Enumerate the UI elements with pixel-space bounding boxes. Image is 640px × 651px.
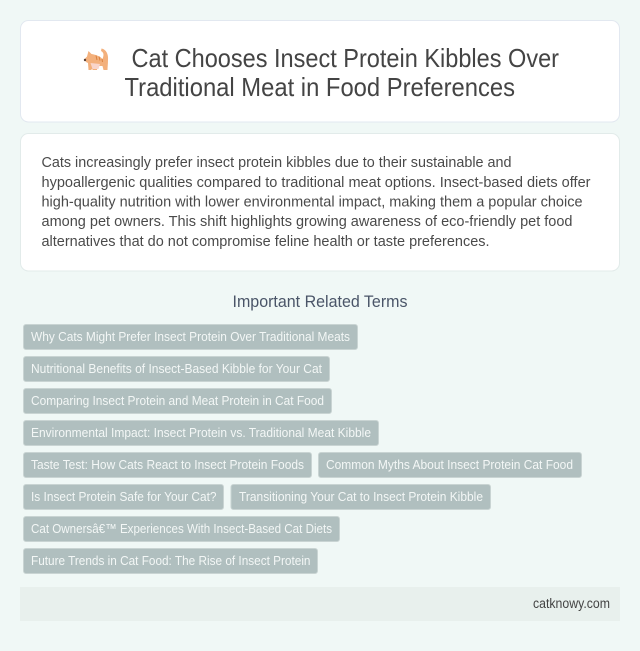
paragraph line 4: among pet owners. This shift highlights growing awareness of eco-friendly pet food [42,213,572,230]
tag: Comparing Insect Protein and Meat Protein in Cat Food [31,393,324,408]
tag [318,452,582,478]
tag: Common Myths About Insect Protein Cat Food [326,457,573,472]
tag: Is Insect Protein Safe for Your Cat? [31,489,216,504]
tag: Environmental Impact: Insect Protein vs. Traditional Meat Kibble [31,425,371,440]
footer site name: catknowy.com [533,596,610,611]
tag [24,548,318,574]
title line 2: Traditional Meat in Food Preferences [124,72,515,102]
tag [24,324,358,350]
paragraph line 3: high-quality nutrition with lower environmental impact, making them a popular choice [42,194,582,210]
paragraph line 5: alternatives that do not compromise feline health or taste preferences. [42,233,490,250]
tag: Nutritional Benefits of Insect-Based Kibble for Your Cat [31,361,322,376]
heading: important related terms: Important Related Terms [232,292,408,311]
tag: Transitioning Your Cat to Insect Protein Kibble [239,489,483,504]
tag: Future Trends in Cat Food: The Rise of Insect Protein [31,553,310,568]
tag [24,356,330,382]
tag: Taste Test: How Cats React to Insect Protein Foods [31,457,304,472]
tag [24,516,340,542]
panel: summary paragraph [20,134,620,271]
tag [24,420,378,446]
paragraph line 2: hypoallergenic qualities compared to traditional meat options. Insect-based diets offer [42,174,591,191]
footer bar [20,587,620,621]
panel: related term tags [24,324,582,574]
paragraph line 1: Cats increasingly prefer insect protein kibbles due to their sustainable and [42,154,512,171]
tag [231,484,490,510]
tag: Cat Ownersâ€™ Experiences With Insect-Based Cat Diets [31,521,332,536]
tag [24,452,312,478]
tag: Why Cats Might Prefer Insect Protein Over Traditional Meats [31,329,350,344]
tag [24,484,224,510]
panel: title card [20,20,620,122]
icon: cat [84,48,108,70]
tag [24,388,332,414]
title line 1: Cat Chooses Insect Protein Kibbles Over [132,43,559,73]
